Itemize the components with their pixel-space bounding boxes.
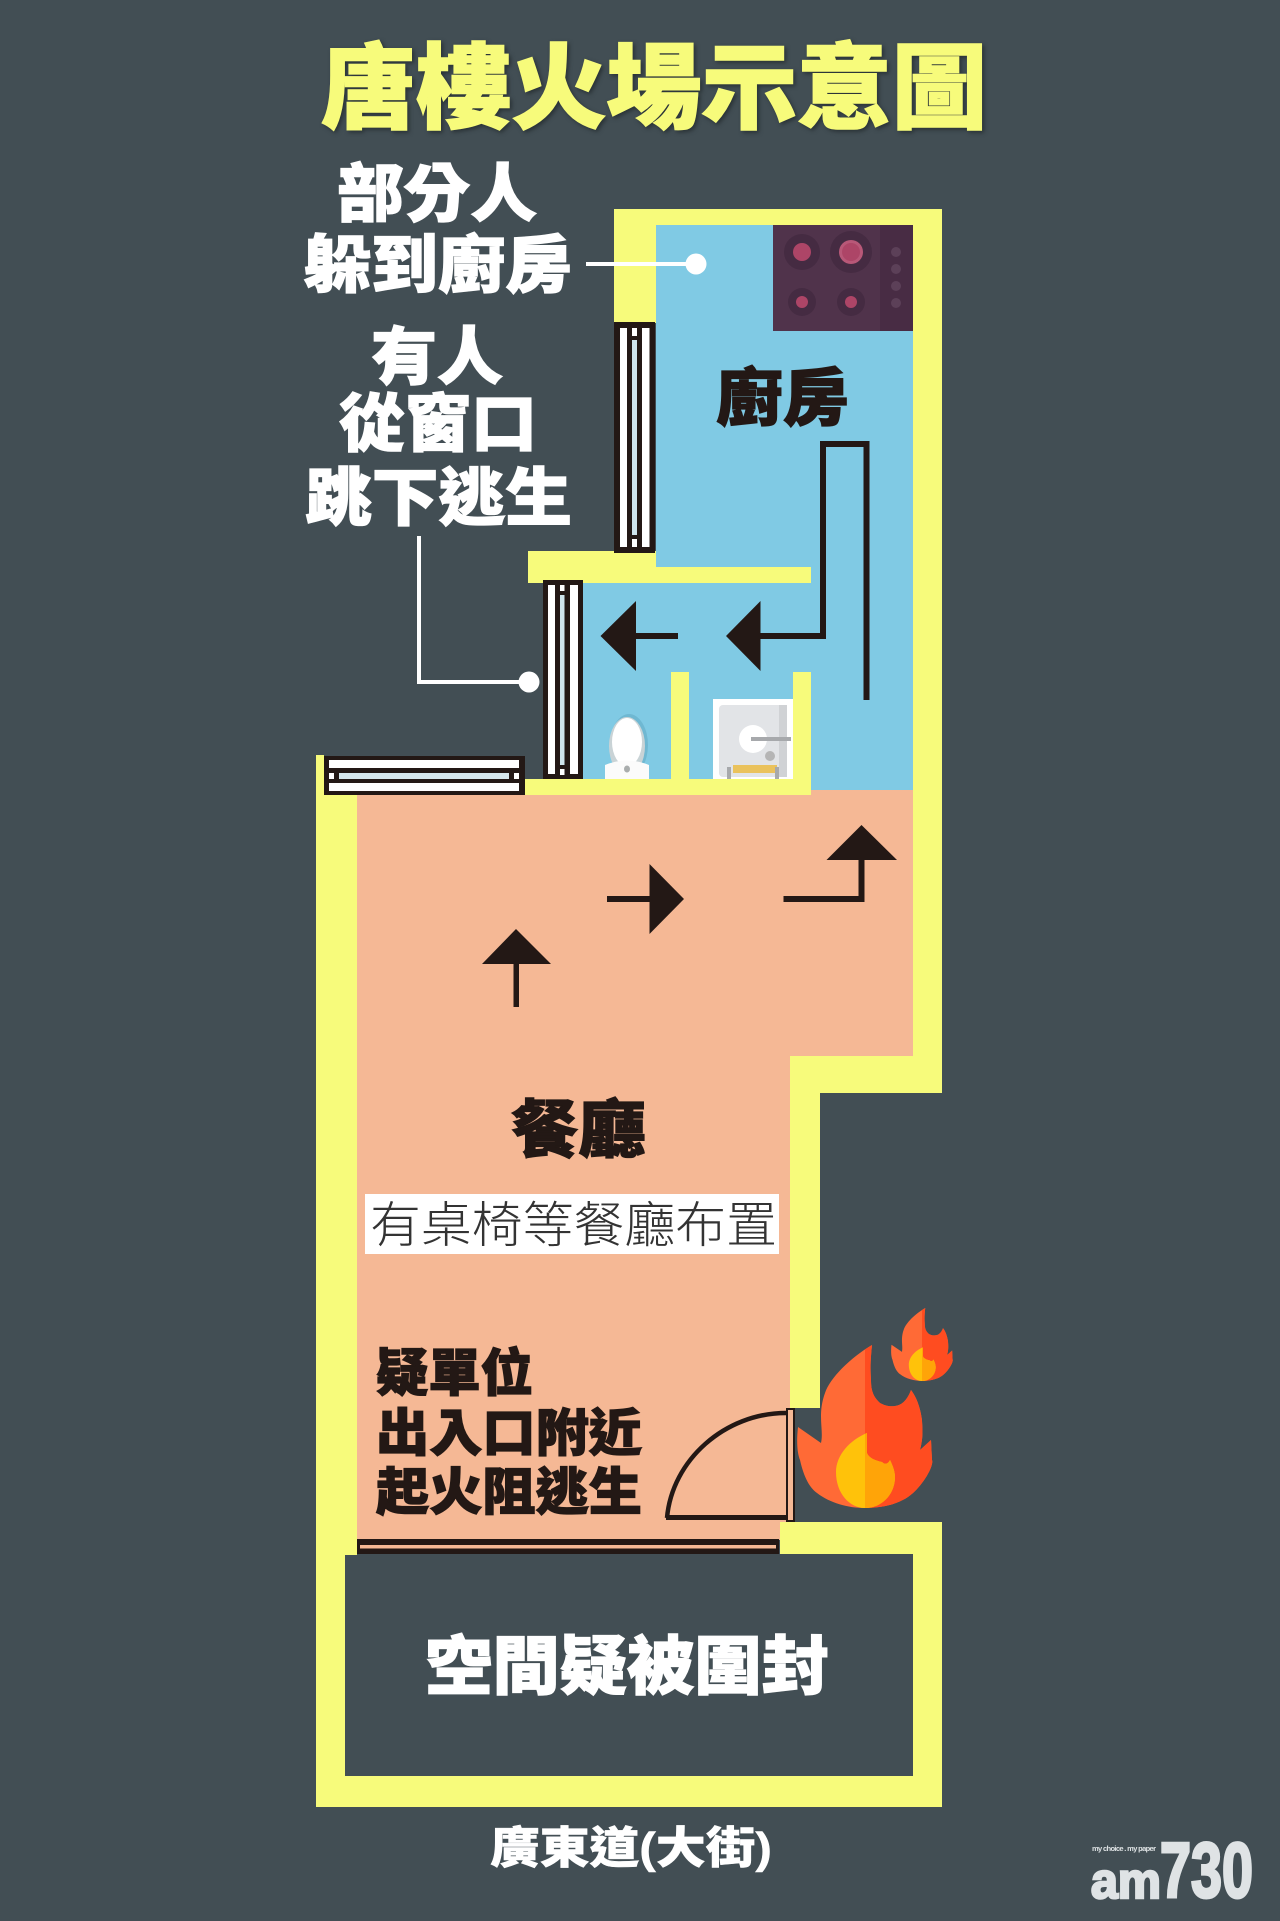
label: enclosed space: 空間疑被圍封 xyxy=(425,1631,829,1703)
note: fire near entrance xyxy=(376,1345,642,1521)
callout: people hid in kitchen: 部分人 xyxy=(337,160,537,230)
note: dining furniture: 有桌椅等餐廳布置 xyxy=(370,1199,777,1253)
window: bathroom xyxy=(543,580,583,779)
callout: people jumped from window: 跳下逃生 xyxy=(305,464,572,534)
callout: people jumped from window: 有人 xyxy=(371,323,503,393)
room: kitchen and bathroom floor xyxy=(583,225,913,790)
label: kitchen: 廚房 xyxy=(716,364,849,434)
arrow: head pointing left to bathroom door xyxy=(726,601,760,671)
logo: am730 xyxy=(1091,1826,1253,1914)
arrow: right in dining room xyxy=(607,864,684,934)
label: dining room: 餐廳 xyxy=(511,1096,646,1166)
label: street name: 廣東道(大街) xyxy=(490,1824,772,1873)
walls xyxy=(316,209,942,1807)
window: street front xyxy=(357,1539,779,1554)
arrow: up in dining room xyxy=(482,929,551,1007)
arrow: left to bathroom window xyxy=(600,601,678,671)
door: entrance xyxy=(666,1409,794,1521)
note: fire near entrance: 起火阻逃生 xyxy=(376,1464,642,1521)
callout: people jumped from window: 從窗口 xyxy=(339,390,537,460)
icon: big flame xyxy=(797,1345,932,1508)
callout: people hid in kitchen: 躲到廚房 xyxy=(304,231,572,301)
callout: people jumped from window xyxy=(305,323,572,692)
icon: small flame xyxy=(891,1308,953,1381)
window: dining room xyxy=(324,756,525,795)
logo: am730: am xyxy=(1091,1853,1161,1909)
arrow: corner up to kitchen xyxy=(784,825,897,899)
icon: stove xyxy=(773,225,913,331)
arrow: long escape route from kitchen xyxy=(757,444,866,700)
enclosed front space xyxy=(345,1555,913,1776)
room: dining room floor xyxy=(357,790,913,1540)
icon: washing machine xyxy=(713,699,793,779)
logo: am730: my choice . my paper xyxy=(1092,1844,1156,1853)
panel: floor plan xyxy=(316,209,942,1807)
note: fire near entrance: 出入口附近 xyxy=(376,1405,642,1462)
title: 唐樓火場示意圖 xyxy=(321,37,987,141)
callout: people hid in kitchen xyxy=(304,160,706,301)
note: fire near entrance: 疑單位 xyxy=(376,1345,533,1402)
window: kitchen xyxy=(614,322,655,553)
icon: toilet xyxy=(605,714,649,779)
